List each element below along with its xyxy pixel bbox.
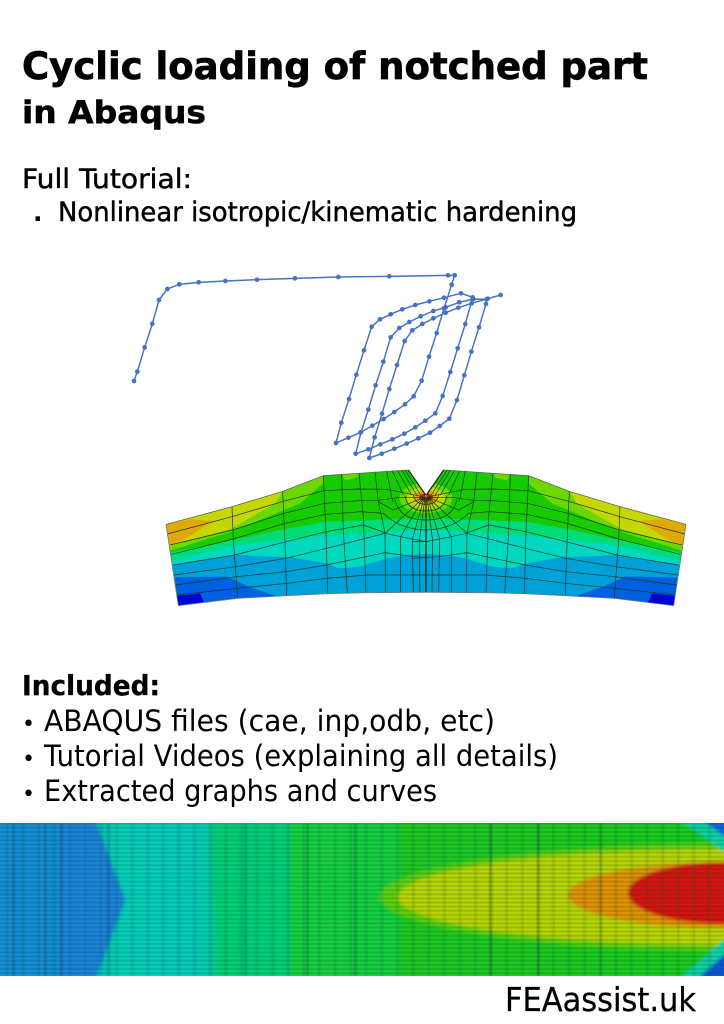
title: Cyclic loading of notched part (22, 45, 648, 88)
included list item: videos: • (22, 747, 35, 772)
right half of the part (393, 460, 692, 610)
FE contour plot: notched part mesh (160, 460, 692, 610)
chart: stress-strain hysteresis curve (134, 275, 501, 458)
tutorial item: Nonlinear isotropic/kinematic hardening (58, 197, 577, 228)
included list item: videos: Tutorial Videos (explaining all details) (43, 739, 558, 773)
included list item: files: ABAQUS files (cae, inp,odb, etc) (44, 704, 495, 738)
contour band: zoomed notch strip (0, 815, 724, 985)
included list item: graphs: • (22, 782, 35, 807)
tutorial item: . (33, 198, 42, 227)
brand footer: FEAassist.uk (505, 980, 697, 1019)
heading: included: Included: (22, 669, 160, 702)
mesh lines over the strip (0, 823, 724, 976)
left half of the part (160, 460, 459, 610)
included list item: graphs: Extracted graphs and curves (44, 774, 437, 808)
included list item: files: • (22, 712, 35, 737)
heading: full tutorial: Full Tutorial: (22, 164, 192, 195)
subtitle: in Abaqus (22, 95, 206, 131)
